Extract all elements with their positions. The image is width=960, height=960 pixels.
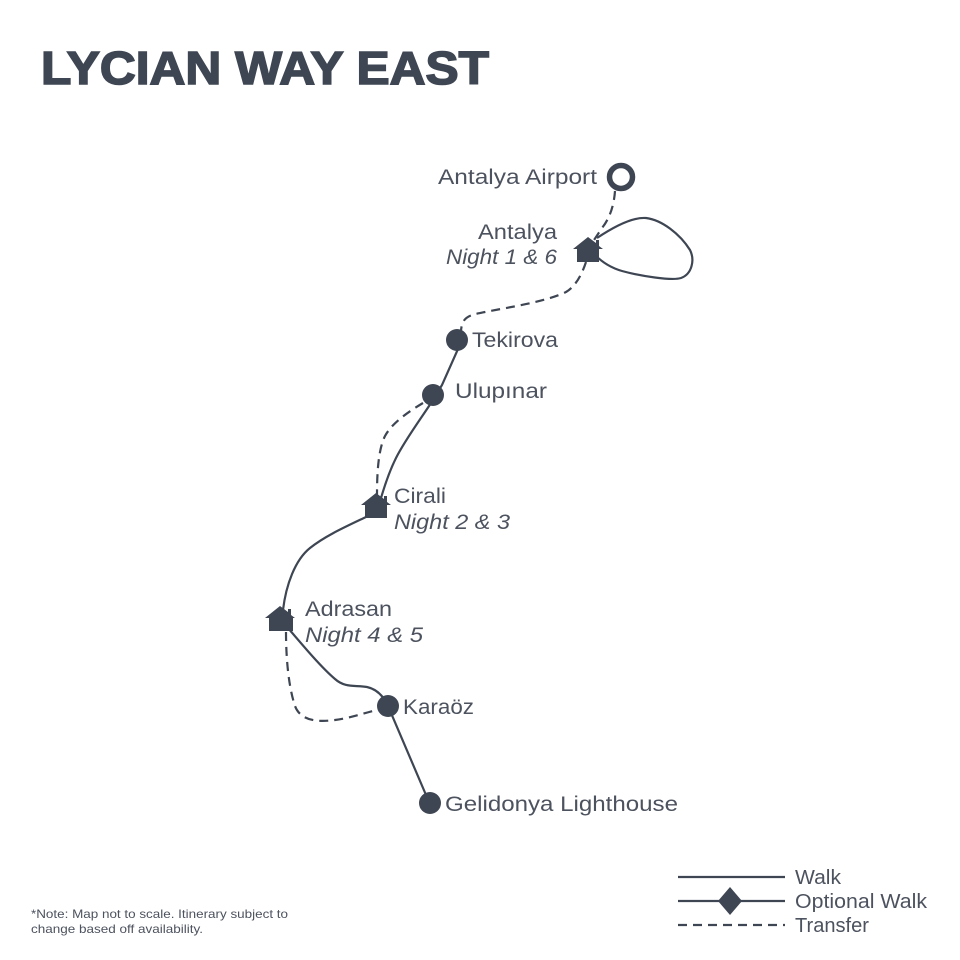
marker: Ulupinar (422, 384, 444, 406)
walk route: Tekirova to Cirali (381, 340, 462, 498)
label: Antalya (446, 221, 557, 269)
footnote: change based off availability. (31, 922, 203, 936)
marker: Tekirova (446, 329, 468, 351)
title: LYCIAN WAY EAST (41, 42, 489, 94)
label: Cirali: Cirali (394, 485, 446, 508)
footnote: *Note: Map not to scale. Itinerary subject to (31, 907, 288, 921)
marker: Gelidonya Lighthouse (419, 792, 441, 814)
label: Antalya: Night 1 & 6 (446, 246, 557, 269)
label: Antalya: Antalya (478, 221, 557, 244)
label: Cirali: Night 2 & 3 (394, 511, 510, 534)
walk route: Cirali to Adrasan (283, 517, 366, 610)
label: Tekirova: Tekirova (472, 329, 558, 352)
label: Adrasan: Night 4 & 5 (305, 624, 423, 647)
legend: optional walk (678, 887, 928, 915)
label: Adrasan (305, 598, 423, 647)
label: Adrasan: Adrasan (305, 598, 392, 621)
transfer: Adrasan to Karaoz (286, 632, 380, 721)
marker: Antalya Airport (610, 166, 632, 188)
house: Antalya (573, 237, 603, 262)
transfer: Ulupinar to Cirali (377, 403, 423, 495)
house: Cirali (361, 493, 391, 518)
walk route: Antalya loop (595, 218, 692, 279)
legend: walk: Walk (795, 867, 842, 889)
transfer: Antalya to Tekirova (461, 262, 586, 331)
label: Cirali (394, 485, 510, 534)
legend: transfer: Transfer (795, 915, 869, 937)
label: Ulupinar: Ulupınar (455, 380, 547, 403)
label: Gelidonya Lighthouse: Gelidonya Lighthouse (445, 793, 678, 816)
label: Karaoz: Karaöz (403, 696, 474, 719)
legend: optional walk: Optional Walk (795, 891, 928, 913)
house: Adrasan (265, 606, 295, 631)
walk route: Adrasan to Gelidonya (288, 628, 429, 802)
label: Antalya Airport: Antalya Airport (438, 166, 597, 189)
transfer: airport to Antalya (594, 191, 615, 240)
legend (678, 867, 928, 937)
marker: Karaoz (377, 695, 399, 717)
route map (283, 191, 692, 802)
footnote (31, 907, 288, 936)
